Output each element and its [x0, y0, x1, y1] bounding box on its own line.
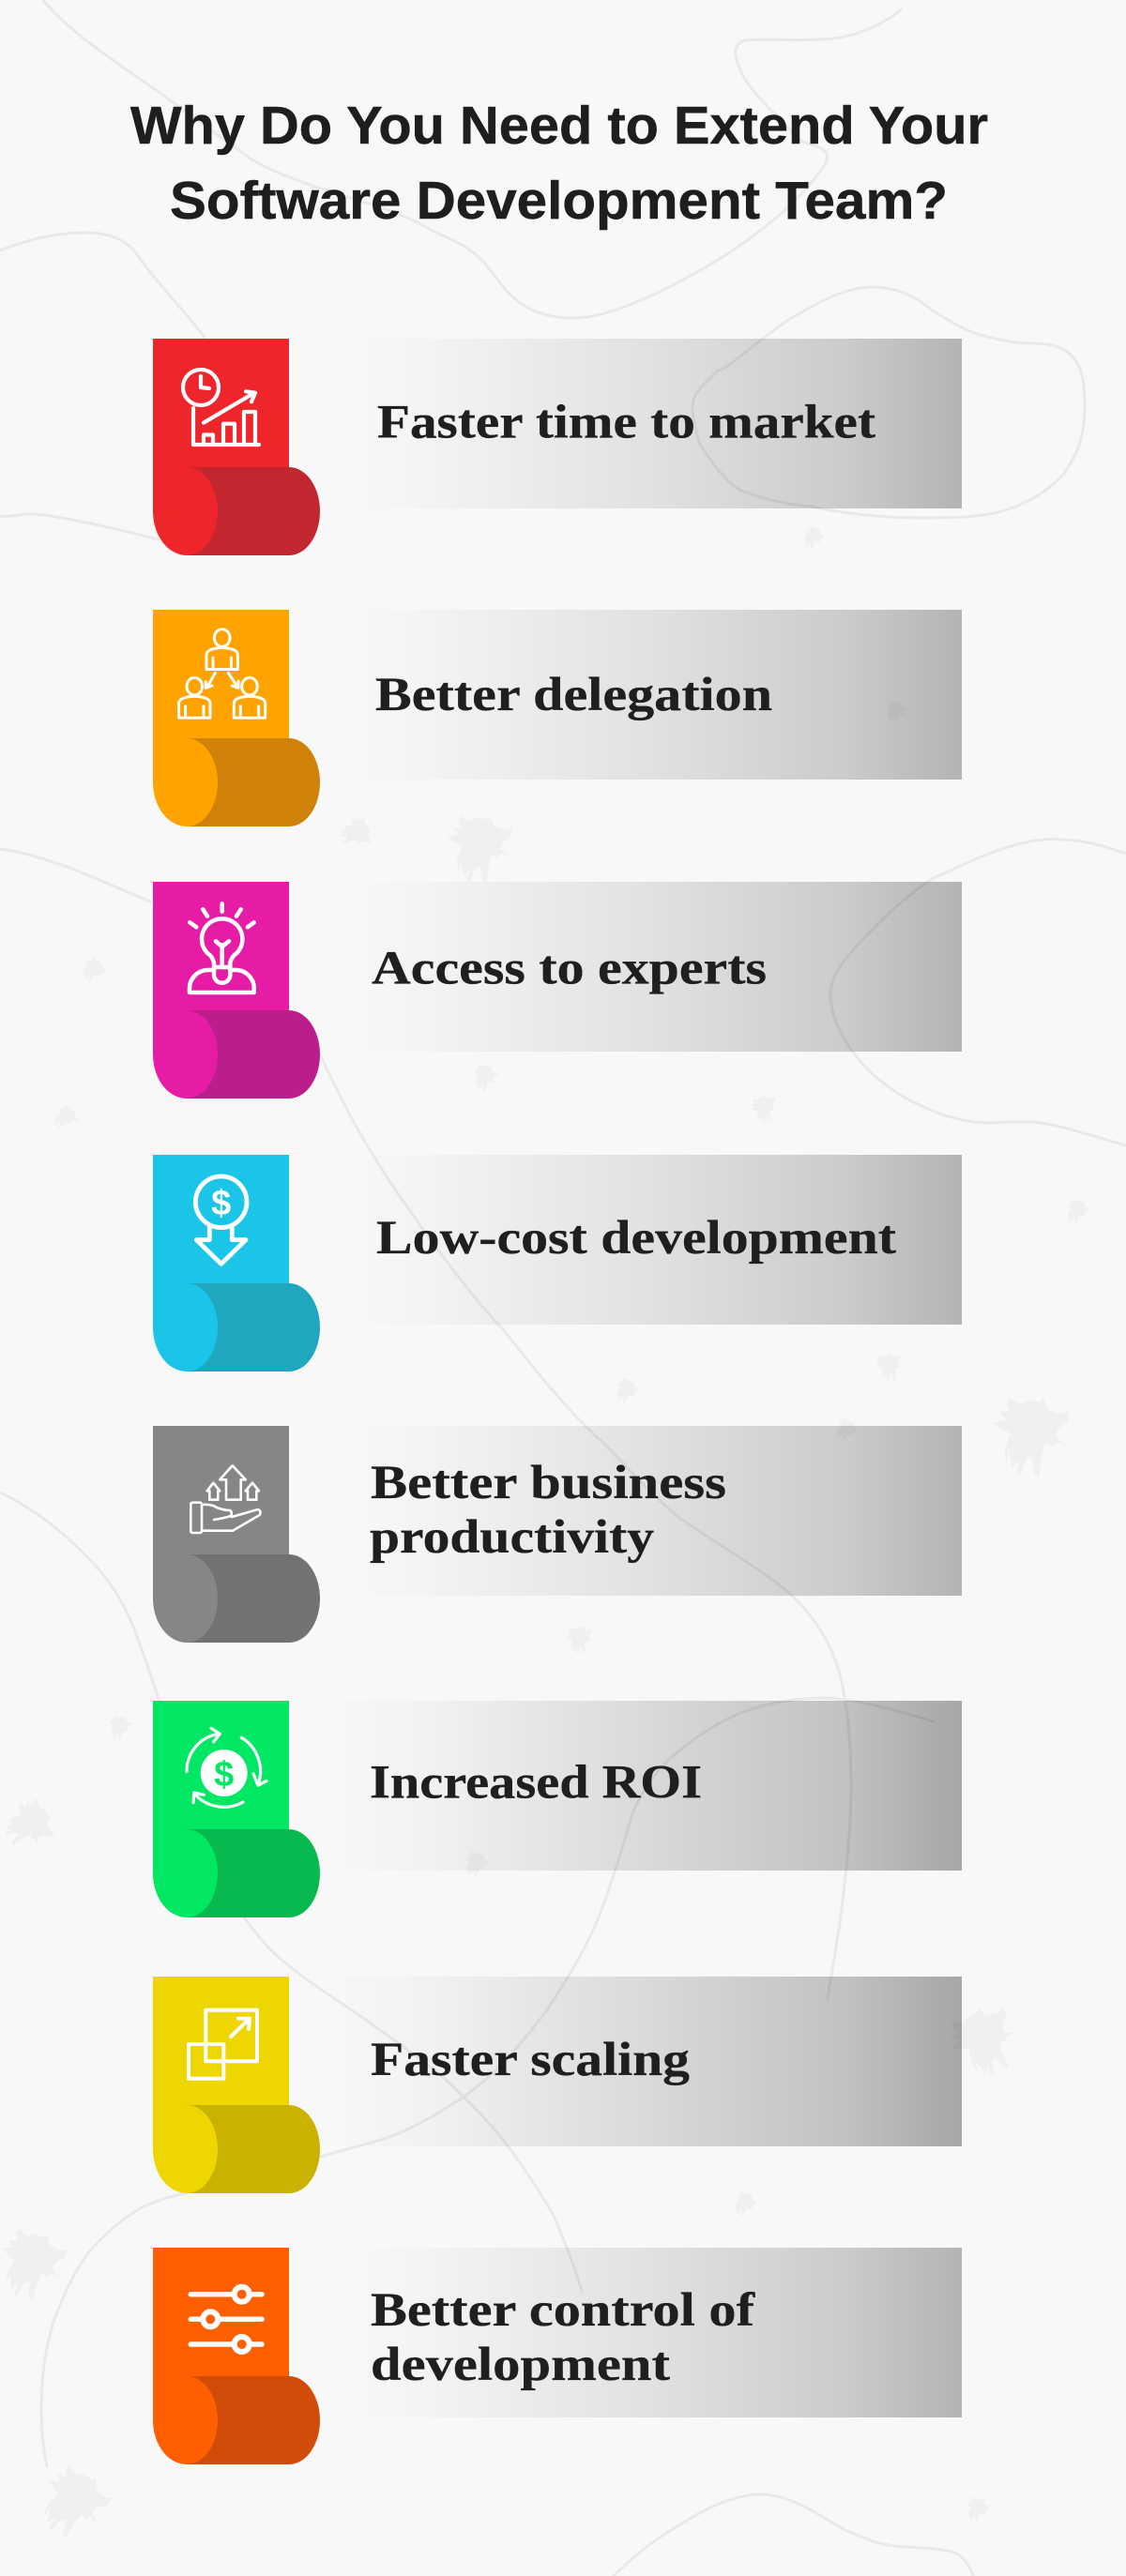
- label band: [347, 610, 962, 780]
- label band: Access to experts: [372, 942, 767, 994]
- icon: scaling squares: [189, 2010, 257, 2079]
- icon: dollar coin with cycle arrows: [187, 1728, 266, 1807]
- scroll shape: orange: [153, 2248, 320, 2464]
- item 6: increased ROI: [153, 1701, 962, 1917]
- label band: Better delegation: [375, 669, 772, 721]
- scroll shape: green: [153, 1701, 320, 1917]
- label band: Better business: [371, 1457, 726, 1509]
- label band: Low-cost development: [376, 1212, 896, 1265]
- label band: productivity: [370, 1511, 654, 1564]
- label band: [347, 882, 962, 1052]
- label band: development: [371, 2339, 670, 2391]
- item 2: better delegation: [153, 610, 962, 826]
- item 4: low-cost development: [153, 1155, 962, 1371]
- icon: dollar coin with down arrow: [195, 1176, 247, 1264]
- icon: head with lightbulb: [190, 903, 254, 993]
- item 5: better business productivity: [153, 1426, 962, 1643]
- label band: [347, 2248, 962, 2417]
- label band: Faster scaling: [371, 2034, 690, 2086]
- item 3: access to experts: [153, 882, 962, 1099]
- label band: [347, 1155, 962, 1325]
- item 8: better control of development: [153, 2248, 962, 2464]
- icon: control sliders: [190, 2287, 262, 2352]
- label band: Increased ROI: [370, 1756, 702, 1809]
- icon: clock and rising bar chart: [183, 370, 259, 445]
- icon: dollar coin with cycle arrows: $: [214, 1755, 234, 1795]
- label band: Better control of: [371, 2284, 755, 2337]
- icon: hand with rising arrows: [190, 1465, 261, 1533]
- item 7: faster scaling: [153, 1977, 962, 2193]
- icon: team delegation: [179, 629, 266, 718]
- item 1: faster time to market: [153, 339, 962, 555]
- scroll shape: red: [153, 339, 320, 555]
- scroll shape: magenta: [153, 882, 320, 1099]
- title: Why Do You Need to Extend Your: [130, 96, 988, 156]
- scroll shape: amber: [153, 610, 320, 826]
- icon: dollar coin with down arrow: $: [211, 1184, 231, 1223]
- title: [130, 96, 988, 231]
- label band: [347, 339, 962, 508]
- label band: Faster time to market: [377, 396, 875, 448]
- title: Software Development Team?: [170, 171, 948, 231]
- label band: [347, 1426, 962, 1596]
- label band: [319, 1701, 962, 1871]
- label band: [319, 1977, 962, 2146]
- scroll shape: grey: [153, 1426, 320, 1643]
- scroll shape: yellow: [153, 1977, 320, 2193]
- scroll shape: cyan: [153, 1155, 320, 1371]
